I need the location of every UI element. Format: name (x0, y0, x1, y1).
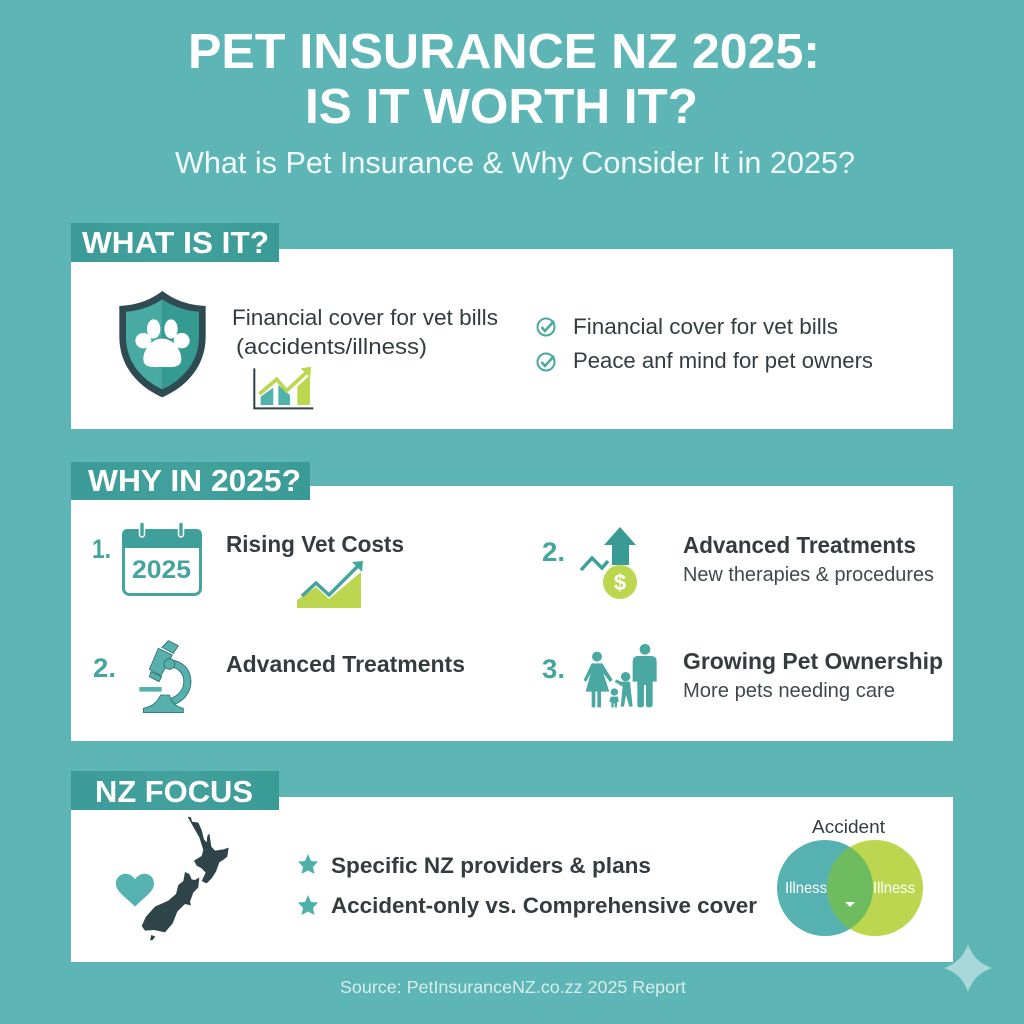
map: new zealand (142, 817, 229, 940)
item: growing pet ownership: 3. (542, 654, 565, 684)
icon: star 1 (298, 854, 318, 874)
heading: nz focus (71, 771, 279, 810)
text: nz points: Accident-only vs. Comprehensive cover (331, 893, 757, 918)
icon: rising area chart (297, 561, 363, 608)
item: advanced treatments right: New therapies & procedures (683, 564, 934, 586)
list: benefits (538, 314, 873, 373)
item: advanced treatments right: Advanced Treatments (683, 532, 916, 558)
chart: venn diagram: Illness (873, 880, 915, 897)
panel: what is it (71, 223, 953, 429)
item: growing pet ownership: More pets needing care (683, 680, 895, 702)
icon: arrow with dollar coin (581, 527, 637, 599)
icon: check 2 (538, 354, 554, 370)
item: advanced treatments left: Advanced Treatments (226, 651, 465, 677)
title: IS IT WORTH IT? (305, 80, 698, 134)
heading: why in 2025: WHY IN 2025? (88, 463, 301, 498)
item: growing pet ownership (542, 644, 943, 707)
text: benefits: Financial cover for vet bills (573, 314, 838, 339)
title: PET INSURANCE NZ 2025: (188, 25, 820, 79)
heading: what is it: WHAT IS IT? (82, 225, 269, 260)
item: rising vet costs: Rising Vet Costs (226, 531, 404, 557)
item: advanced treatments left: 2. (93, 653, 116, 683)
text: definition: (accidents/illness) (236, 334, 427, 359)
chart: venn diagram: Illness (785, 880, 827, 897)
icon: microscope (139, 641, 187, 713)
text: nz points (331, 853, 757, 918)
panel: nz focus (71, 771, 953, 962)
text: benefits: Peace anf mind for pet owners (573, 348, 873, 373)
icon: family (584, 644, 657, 707)
item: growing pet ownership: Growing Pet Ownership (683, 648, 943, 674)
source: Source: PetInsuranceNZ.co.zz 2025 Report (340, 977, 686, 997)
title (188, 25, 820, 134)
list: nz points (298, 853, 757, 918)
icon: check 1 (538, 318, 554, 336)
icon: calendar 2025: 2025 (132, 556, 191, 584)
item: advanced treatments right (542, 527, 934, 599)
text: benefits (573, 314, 873, 373)
icon: shield with paw (119, 291, 206, 397)
text: nz points: Specific NZ providers & plans (331, 853, 651, 878)
subtitle: What is Pet Insurance & Why Consider It in 2025? (175, 145, 855, 180)
item: advanced treatments left (93, 641, 465, 713)
item: advanced treatments right: 2. (542, 537, 565, 567)
icon: bar chart with arrow (254, 367, 313, 408)
text: definition: Financial cover for vet bills (232, 305, 498, 330)
icon: heart (116, 874, 154, 907)
icon: star 2 (298, 895, 318, 915)
icon: arrow with dollar coin: $ (614, 570, 626, 595)
panel: why in 2025 (71, 462, 953, 741)
icon: calendar 2025 (122, 522, 202, 594)
item: rising vet costs (92, 522, 404, 608)
icon: sparkle (944, 944, 992, 992)
heading: nz focus: NZ FOCUS (95, 774, 253, 809)
item: rising vet costs: 1. (92, 534, 111, 564)
chart: venn diagram: Accident (812, 817, 885, 837)
text: definition (232, 305, 498, 359)
chart: venn diagram (777, 817, 923, 936)
